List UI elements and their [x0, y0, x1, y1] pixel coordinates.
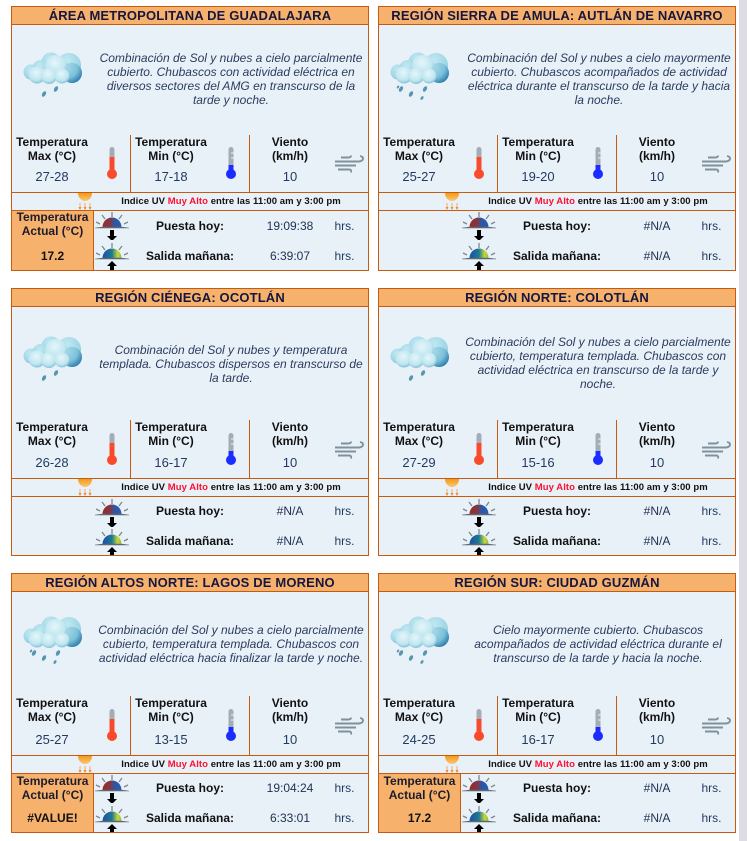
- icon: wind: [702, 716, 731, 735]
- label: max temperature: Temperatura: [383, 696, 455, 710]
- label: wind: Viento: [639, 420, 675, 434]
- label: wind: (km/h): [272, 149, 308, 163]
- UV index note: Indice UV Muy Alto entre las 11:00 am y 3:00 pm: [121, 196, 341, 207]
- forecast text: diversos sectores del AMG en transcurso de la: [107, 79, 355, 93]
- label: wind: [638, 135, 675, 163]
- value: current temperature: 17.2: [41, 249, 64, 263]
- icon: rain cloud: [390, 336, 449, 381]
- label: min temperature: [497, 420, 579, 448]
- label: min temperature: Min (°C): [148, 710, 194, 724]
- heading: REGIÓN NORTE: COLOTLÁN: [465, 290, 649, 305]
- icon: red thermometer: [472, 709, 486, 742]
- value: max temperature: 27-29: [402, 455, 436, 470]
- label: sunrise: Salida mañana:: [513, 249, 601, 263]
- forecast text: [100, 51, 362, 107]
- icon: rain cloud: [24, 336, 82, 381]
- unit: sunset: hrs.: [701, 219, 722, 233]
- value: sunrise: #N/A: [644, 534, 670, 548]
- unit: sunset: hrs.: [334, 219, 354, 233]
- label: min temperature: Temperatura: [135, 135, 207, 149]
- icon: blue thermometer: [226, 433, 236, 465]
- icon: red thermometer: [105, 709, 119, 742]
- icon: rain cloud: [390, 52, 449, 100]
- UV index note: Indice UV Muy Alto entre las 11:00 am y 3:00 pm: [488, 196, 708, 207]
- icon: UV sun: [444, 479, 460, 496]
- label: max temperature: Max (°C): [395, 434, 443, 448]
- value: wind: 10: [650, 732, 664, 747]
- unit: sunrise: hrs.: [334, 534, 354, 548]
- value: max temperature: 25-27: [402, 169, 436, 184]
- heading: REGIÓN CIÉNEGA: OCOTLÁN: [95, 290, 285, 305]
- panel: Región Sierra de Amula: [378, 6, 736, 271]
- icon: sunrise: [95, 529, 129, 555]
- icon: sunset: [462, 212, 496, 240]
- value: wind: 10: [650, 455, 664, 470]
- label: min temperature: Min (°C): [515, 710, 561, 724]
- icon: sunset: [94, 775, 130, 803]
- label: wind: Viento: [272, 420, 308, 434]
- label: wind: [616, 420, 698, 448]
- value: sunset: 19:09:38: [267, 219, 313, 233]
- forecast text: actividad eléctrica en transcurso de la tarde y: [478, 363, 718, 377]
- icon: rain cloud: [390, 616, 450, 668]
- label: max temperature: Temperatura: [16, 135, 88, 149]
- label: current temperature: Actual (°C): [389, 788, 450, 802]
- value: max temperature: 24-25: [402, 732, 436, 747]
- current temperature cell: [11, 773, 94, 833]
- label: sunrise: Salida mañana:: [146, 249, 234, 263]
- icon: sunrise: [462, 243, 496, 270]
- label: min temperature: [497, 696, 579, 724]
- value: min temperature: 13-15: [154, 732, 188, 747]
- value: sunrise: #N/A: [644, 811, 670, 825]
- icon: sunrise: [461, 806, 497, 832]
- label: min temperature: Min (°C): [515, 434, 561, 448]
- forecast text: [465, 335, 731, 391]
- forecast text: [467, 51, 731, 107]
- forecast text: cubierto, temperatura templada. Chubascos con: [103, 637, 359, 651]
- current temperature cell: [11, 210, 94, 271]
- icon: red thermometer: [107, 147, 117, 179]
- label: current temperature: [378, 774, 461, 802]
- UV index note: Indice UV Muy Alto entre las 11:00 am y 3:00 pm: [488, 759, 708, 770]
- label: current temperature: Temperatura: [17, 774, 88, 788]
- value: wind: 10: [283, 455, 297, 470]
- label: sunset: Puesta hoy:: [523, 781, 591, 795]
- forecast text: actividad eléctrica hacia finalizar la tarde y noche.: [99, 651, 363, 665]
- icon: red thermometer: [107, 433, 117, 465]
- label: current temperature: [16, 210, 88, 238]
- icon: sunset: [461, 775, 497, 803]
- icon: blue thermometer: [591, 433, 605, 466]
- label: sunrise: Salida mañana:: [513, 811, 601, 825]
- panel: Región Ciénega: [11, 288, 369, 556]
- label: max temperature: [16, 420, 88, 448]
- label: max temperature: Max (°C): [28, 710, 76, 724]
- forecast text: eléctrica durante el transcurso de la tarde y hacia: [468, 79, 730, 93]
- icon: sunset: [461, 499, 497, 527]
- heading: [378, 288, 736, 307]
- unit: sunset: hrs.: [701, 781, 722, 795]
- value: sunrise: #N/A: [644, 249, 670, 263]
- forecast text: Combinación del Sol y nubes a cielo parcialmente: [98, 623, 364, 637]
- label: wind: Viento: [639, 135, 675, 149]
- forecast text: tarde y noche.: [193, 93, 269, 107]
- icon: rain cloud: [24, 52, 82, 97]
- icon: sunrise: [94, 806, 130, 832]
- icon: sunset: [95, 212, 129, 240]
- icon: UV sun: [78, 193, 92, 210]
- value: sunset: #N/A: [644, 781, 670, 795]
- panel: Región Norte: [378, 288, 736, 556]
- forecast text: [463, 623, 733, 665]
- scrollbar track: [739, 0, 747, 841]
- UV index note: Indice UV Muy Alto entre las 11:00 am y 3:00 pm: [488, 482, 708, 493]
- UV index note: Indice UV Muy Alto entre las 11:00 am y 3:00 pm: [121, 482, 341, 493]
- label: min temperature: [135, 420, 207, 448]
- icon: UV sun: [445, 193, 459, 210]
- icon: wind: [335, 155, 364, 173]
- value: sunset: #N/A: [644, 219, 670, 233]
- label: wind: (km/h): [639, 149, 675, 163]
- forecast text: la noche.: [575, 93, 623, 107]
- label: wind: [272, 420, 308, 448]
- icon: wind: [335, 441, 364, 459]
- heading: REGIÓN SIERRA DE AMULA: AUTLÁN DE NAVARRO: [391, 8, 723, 23]
- label: sunrise: Salida mañana:: [146, 534, 234, 548]
- label: min temperature: Temperatura: [502, 696, 574, 710]
- unit: sunrise: hrs.: [334, 811, 354, 825]
- icon: sunset: [95, 499, 129, 527]
- current temperature cell: [378, 773, 461, 833]
- label: max temperature: [383, 420, 455, 448]
- icon: blue thermometer: [226, 147, 236, 179]
- value: min temperature: 16-17: [154, 455, 188, 470]
- label: min temperature: Min (°C): [148, 434, 194, 448]
- value: sunrise: 6:33:01: [270, 811, 310, 825]
- value: sunrise: 6:39:07: [270, 249, 310, 263]
- value: max temperature: 26-28: [35, 455, 69, 470]
- icon: UV sun: [444, 756, 460, 773]
- label: wind: [272, 135, 308, 163]
- heading: [11, 573, 369, 592]
- UV index note: Indice UV Muy Alto entre las 11:00 am y 3:00 pm: [121, 759, 341, 770]
- icon: blue thermometer: [591, 709, 605, 742]
- heading: [11, 6, 369, 25]
- label: sunset: Puesta hoy:: [156, 504, 224, 518]
- label: max temperature: Temperatura: [383, 135, 455, 149]
- heading: [378, 573, 736, 592]
- label: wind: [616, 696, 698, 724]
- value: current temperature: 17.2: [408, 811, 431, 825]
- label: max temperature: [16, 135, 88, 163]
- label: min temperature: Temperatura: [135, 420, 207, 434]
- icon: sunrise: [95, 243, 129, 270]
- panel: Región Sur: [378, 573, 736, 833]
- label: wind: (km/h): [639, 434, 675, 448]
- label: max temperature: [11, 696, 93, 724]
- label: current temperature: [11, 774, 94, 802]
- label: current temperature: Temperatura: [384, 774, 455, 788]
- icon: wind: [335, 716, 364, 735]
- unit: sunrise: hrs.: [701, 249, 722, 263]
- unit: sunset: hrs.: [701, 504, 722, 518]
- unit: sunset: hrs.: [334, 504, 354, 518]
- forecast text: la tarde.: [209, 371, 253, 385]
- icon: UV sun: [78, 479, 92, 496]
- label: sunset: Puesta hoy:: [156, 781, 224, 795]
- label: wind: (km/h): [272, 434, 308, 448]
- label: max temperature: [383, 135, 455, 163]
- icon: red thermometer: [474, 147, 484, 179]
- value: sunset: #N/A: [644, 504, 670, 518]
- heading: [11, 288, 369, 307]
- label: min temperature: Temperatura: [502, 420, 574, 434]
- label: wind: Viento: [272, 135, 308, 149]
- forecast text: Combinación de Sol y nubes a cielo parcialmente: [100, 51, 362, 65]
- forecast text: Combinación del Sol y nubes a cielo parcialmente: [465, 335, 731, 349]
- forecast text: Combinación del Sol y nubes a cielo mayormente: [467, 51, 731, 65]
- forecast text: acompañados de actividad eléctrica durante el: [474, 637, 722, 651]
- forecast text: Cielo mayormente cubierto. Chubascos: [493, 623, 703, 637]
- forecast text: cubierto. Chubascos con actividad eléctrica en: [107, 65, 355, 79]
- label: wind: Viento: [639, 696, 675, 710]
- label: max temperature: Temperatura: [16, 696, 88, 710]
- value: sunset: #N/A: [277, 504, 303, 518]
- icon: rain cloud: [23, 616, 83, 668]
- label: wind: Viento: [272, 696, 308, 710]
- label: max temperature: Max (°C): [395, 710, 443, 724]
- label: sunset: Puesta hoy:: [523, 219, 591, 233]
- label: sunset: Puesta hoy:: [523, 504, 591, 518]
- label: max temperature: Temperatura: [383, 420, 455, 434]
- label: wind: [249, 696, 331, 724]
- heading: REGIÓN SUR: CIUDAD GUZMÁN: [454, 575, 660, 590]
- icon: sunrise: [461, 529, 497, 555]
- value: sunset: 19:04:24: [267, 781, 313, 795]
- icon: UV sun: [77, 756, 93, 773]
- label: min temperature: Temperatura: [502, 135, 574, 149]
- value: min temperature: 16-17: [521, 732, 555, 747]
- label: max temperature: Max (°C): [28, 434, 76, 448]
- label: sunrise: Salida mañana:: [513, 534, 601, 548]
- value: min temperature: 17-18: [154, 169, 188, 184]
- panel: Región Altos Norte: [11, 573, 369, 833]
- value: sunrise: #N/A: [277, 534, 303, 548]
- unit: sunrise: hrs.: [701, 534, 722, 548]
- label: sunrise: Salida mañana:: [146, 811, 234, 825]
- label: min temperature: [502, 135, 574, 163]
- icon: blue thermometer: [224, 709, 238, 742]
- value: min temperature: 15-16: [521, 455, 555, 470]
- heading: ÁREA METROPOLITANA DE GUADALAJARA: [49, 8, 331, 23]
- label: min temperature: Temperatura: [135, 696, 207, 710]
- label: current temperature: Actual (°C): [22, 788, 83, 802]
- label: max temperature: Max (°C): [395, 149, 443, 163]
- forecast text: templada. Chubascos dispersos en transcurso de: [99, 357, 363, 371]
- label: min temperature: Min (°C): [148, 149, 194, 163]
- label: min temperature: [130, 696, 212, 724]
- forecast text: [96, 623, 366, 665]
- icon: wind: [702, 440, 731, 459]
- value: wind: 10: [283, 169, 297, 184]
- label: min temperature: Min (°C): [515, 149, 561, 163]
- icon: red thermometer: [472, 433, 486, 466]
- icon: wind: [702, 155, 731, 173]
- value: max temperature: 25-27: [35, 732, 69, 747]
- value: max temperature: 27-28: [35, 169, 69, 184]
- unit: sunrise: hrs.: [334, 249, 354, 263]
- label: sunset: Puesta hoy:: [156, 219, 224, 233]
- label: min temperature: [135, 135, 207, 163]
- label: max temperature: Max (°C): [28, 149, 76, 163]
- value: wind: 10: [283, 732, 297, 747]
- value: wind: 10: [650, 169, 664, 184]
- value: min temperature: 19-20: [521, 169, 555, 184]
- unit: sunrise: hrs.: [701, 811, 722, 825]
- forecast text: noche.: [580, 377, 616, 391]
- heading: REGIÓN ALTOS NORTE: LAGOS DE MORENO: [45, 575, 335, 590]
- forecast text: Combinación del Sol y nubes y temperatura: [115, 343, 347, 357]
- label: wind: (km/h): [272, 710, 308, 724]
- label: current temperature: Temperatura: [17, 210, 88, 224]
- forecast text: [99, 343, 363, 385]
- icon: blue thermometer: [593, 147, 603, 179]
- label: max temperature: [378, 696, 460, 724]
- forecast text: cubierto, temperatura templada. Chubascos con: [470, 349, 726, 363]
- label: max temperature: Temperatura: [16, 420, 88, 434]
- forecast text: cubierto. Chubascos acompañados de actividad: [471, 65, 727, 79]
- forecast text: transcurso de la tarde y hacia la noche.: [493, 651, 703, 665]
- panel: Área Metropolitana de Guadalajara: [11, 6, 369, 271]
- value: current temperature: #VALUE!: [27, 811, 78, 825]
- unit: sunset: hrs.: [334, 781, 354, 795]
- label: wind: (km/h): [639, 710, 675, 724]
- label: current temperature: Actual (°C): [22, 224, 83, 238]
